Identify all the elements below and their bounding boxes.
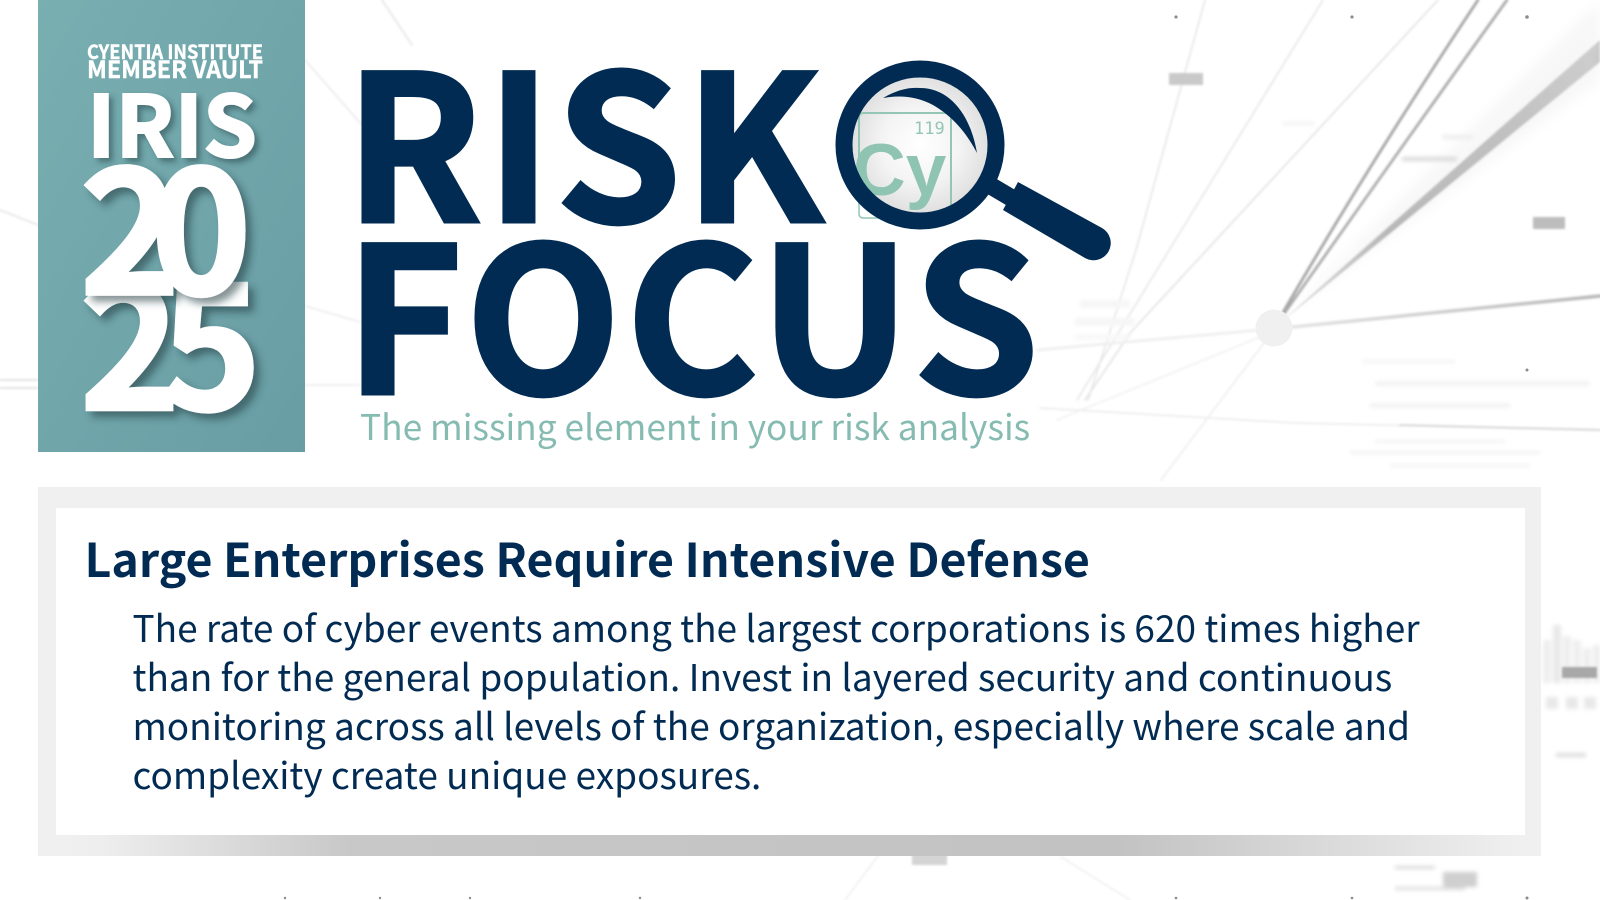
number: 25: 25 <box>80 212 261 458</box>
icon: magnifying glass over Cy element tile <box>844 69 1111 260</box>
number: 20: 20 <box>80 97 251 343</box>
label: Cyentia Institute Member Vault <box>87 36 263 85</box>
title: Risk Focus: FOCUS <box>344 160 1044 453</box>
element symbol: Cy <box>853 130 947 211</box>
body text: monitoring across all levels of the organization, especially where scale and <box>132 697 1410 751</box>
label: Cyentia Institute Member Vault: CYENTIA INSTITUTE <box>87 36 263 65</box>
label: IRIS: IRIS <box>87 59 257 182</box>
body text: than for the general population. Invest in layered security and continuous <box>132 648 1392 702</box>
subtitle: The missing element in your risk analysis <box>360 400 1030 451</box>
body text: The rate of cyber events among the largest corporations is 620 times higher <box>132 599 1420 653</box>
body text <box>132 599 1420 800</box>
title: Risk Focus <box>344 0 1044 453</box>
element number: 119 <box>914 119 945 139</box>
panel: Iris 2025 member vault badge <box>38 0 305 458</box>
label: Cyentia Institute Member Vault: MEMBER VAULT <box>87 51 263 85</box>
heading: Large Enterprises Require Intensive Defense <box>84 524 1090 591</box>
body text: complexity create unique exposures. <box>132 746 761 800</box>
panel: key takeaway card <box>38 487 1541 856</box>
